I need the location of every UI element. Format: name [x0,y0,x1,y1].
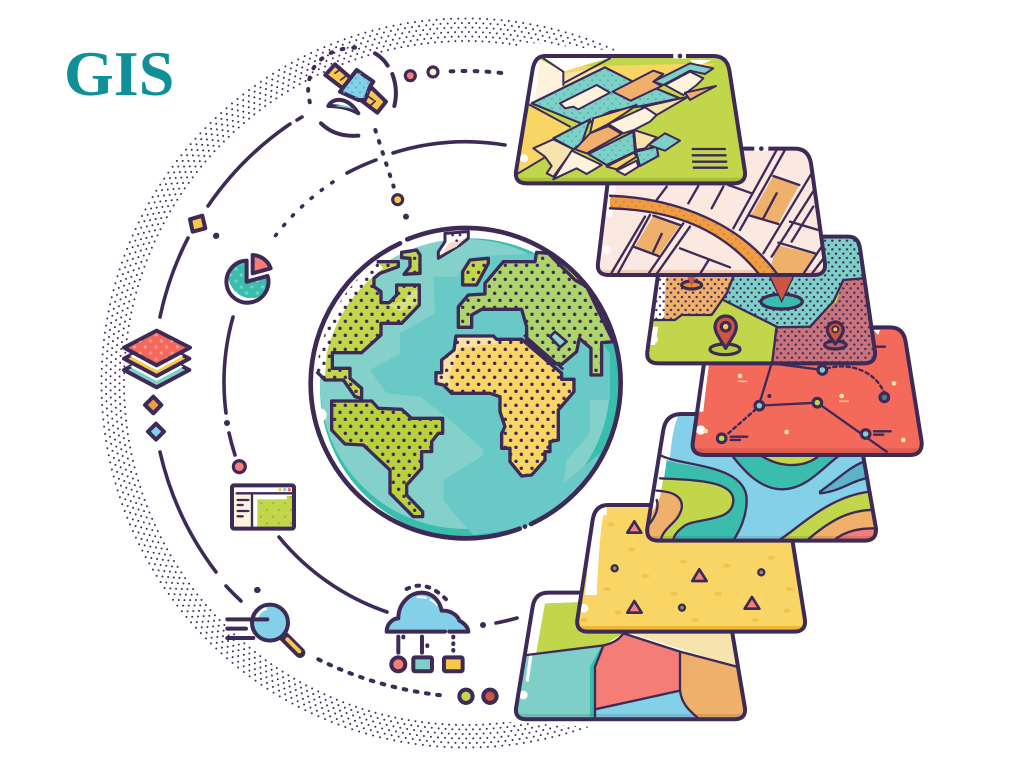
pin large [761,294,802,309]
pin pink zone [825,322,846,349]
icon: cloud network [387,586,468,671]
continent: Africa [436,335,574,476]
pin orange zone [682,281,702,289]
panel: location pins map [640,230,880,367]
continent: North America [317,262,419,398]
icon: satellite [325,64,386,113]
orbit rings [160,117,517,628]
continent: arctic island [438,232,468,258]
panel: contour map [640,410,880,543]
street blocks [635,176,815,277]
globe outline [311,228,621,538]
icon: orange diamond [145,397,161,413]
panel: red network map [690,325,927,457]
halftone dotted outer ring [100,18,614,748]
pin green zone [710,316,740,355]
route arc [610,196,777,273]
continent: South America [332,401,443,517]
continent: Iceland island [463,258,488,285]
title: GIS [64,38,174,109]
panel: top parcel map [510,50,750,187]
map markers triangles [627,521,759,613]
bottom left icons [227,461,497,703]
icon: small yellow square [190,216,205,232]
globe ocean [320,238,618,536]
satellite orbit and connectors [308,48,510,220]
globe [308,226,623,541]
icon: pie chart [226,255,271,303]
icon: map layers [124,331,190,387]
icon: magnifier with data lines [227,605,300,653]
icon: blue diamond [148,424,164,440]
panel: street map [593,145,830,277]
network nodes [717,366,889,443]
icon: browser window [232,485,294,529]
continent: Eurasia [458,252,613,375]
icon: pie chart and diamonds and layers [124,216,271,440]
panel: bottom polygon map [510,590,750,723]
panel: yellow terrain map [573,503,810,633]
continent: Greenland [402,250,420,274]
